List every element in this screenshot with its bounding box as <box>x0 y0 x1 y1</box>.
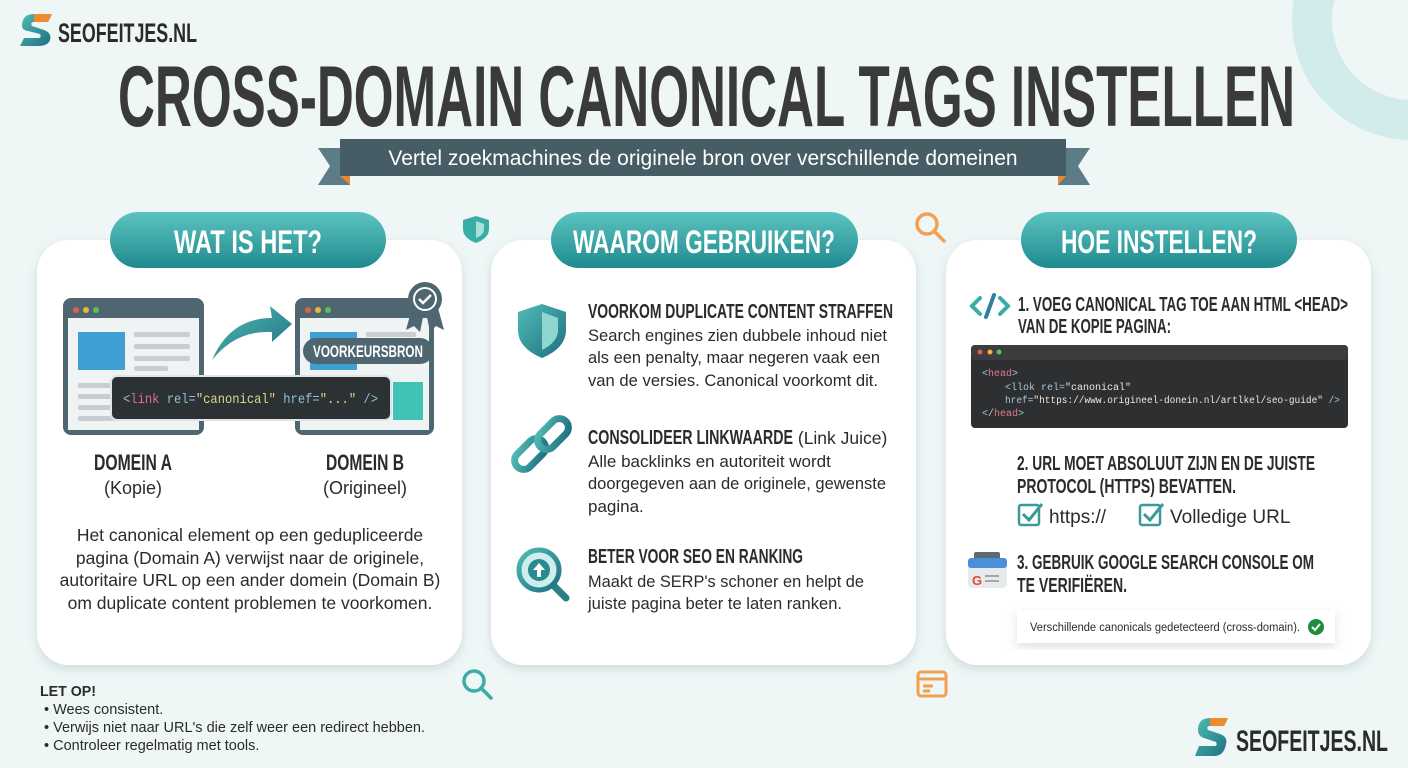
decorative ring <box>1312 0 1408 120</box>
step 1 <box>1018 294 1348 338</box>
labels domein: DOMEIN A <box>94 450 172 475</box>
checkboxes <box>1019 504 1290 528</box>
icon: search console: G <box>972 573 982 588</box>
notification: Verschillende canonicals gedetecteerd (cross-domain). <box>1030 622 1300 634</box>
icon: magnifier up <box>519 550 566 598</box>
arrow <box>212 306 292 360</box>
checkboxes: Volledige URL <box>1170 507 1290 528</box>
note: let op: • Controleer regelmatig met tools. <box>44 738 259 754</box>
item 2 <box>588 427 887 516</box>
logo bottom <box>1195 718 1388 758</box>
heading pill: wat is het: WAT IS HET? <box>174 224 322 260</box>
code block: href="https://www.origineel-donein.nl/artlkel/seo-guide" /> <box>1005 395 1340 407</box>
item 1: van de versies. Canonical voorkomt dit. <box>588 371 878 390</box>
badge: voorkeursbron <box>303 338 433 364</box>
item 2: CONSOLIDEER LINKWAARDE (Link Juice) <box>588 427 887 449</box>
step 1: VAN DE KOPIE PAGINA: <box>1018 316 1171 338</box>
icon: small shield <box>463 216 489 243</box>
item 3: Maakt de SERP's schoner en helpt de <box>588 572 864 591</box>
item 2: Alle backlinks en autoriteit wordt <box>588 452 831 471</box>
labels domein: (Kopie) <box>104 478 162 498</box>
description: autoritaire URL op een ander domein (Domain B) <box>60 570 440 590</box>
panel: waarom gebruiken <box>491 212 916 665</box>
item 1: Search engines zien dubbele inhoud niet <box>588 326 887 345</box>
subtitle ribbon: Vertel zoekmachines de originele bron over verschillende domeinen <box>388 147 1018 170</box>
code block: </head> <box>982 408 1024 420</box>
item 2: pagina. <box>588 497 644 516</box>
heading pill: waarom: WAAROM GEBRUIKEN? <box>573 224 835 260</box>
icon: shield <box>518 304 566 358</box>
item 2: doorgegeven aan de originele, gewenste <box>588 474 886 493</box>
heading pill: wat is het <box>110 212 386 268</box>
browser: domein B <box>295 298 434 435</box>
code snippet <box>111 376 391 420</box>
icon: small magnifier teal <box>464 671 491 698</box>
notification <box>1017 610 1335 643</box>
panel: wat is het <box>37 212 462 665</box>
item 1: als een penalty, maar negeren vaak een <box>588 348 880 367</box>
item 3: BETER VOOR SEO EN RANKING <box>588 546 803 568</box>
heading pill: waarom <box>551 212 858 268</box>
panel: hoe instellen <box>946 212 1371 665</box>
item 3: juiste pagina beter te laten ranken. <box>587 594 842 613</box>
code block: <head> <box>982 368 1018 380</box>
icon: search console <box>968 552 1007 588</box>
code block: <llok rel="canonical" <box>1005 382 1131 394</box>
step 2 <box>1017 453 1315 498</box>
step 2: PROTOCOL (HTTPS) BEVATTEN. <box>1017 476 1236 498</box>
heading pill: hoe <box>1021 212 1297 268</box>
note: let op: LET OP! <box>40 683 96 700</box>
icon: small magnifier orange <box>917 214 944 241</box>
icon: browser orange <box>918 672 946 696</box>
checkboxes: https:// <box>1049 507 1107 528</box>
code block <box>971 345 1348 428</box>
note: let op <box>40 683 425 754</box>
labels domein <box>94 450 407 498</box>
item 1: VOORKOM DUPLICATE CONTENT STRAFFEN <box>588 301 893 323</box>
labels domein: (Origineel) <box>323 478 407 498</box>
note: let op: • Wees consistent. <box>44 702 163 718</box>
item 3 <box>587 546 864 613</box>
badge: voorkeursbron: VOORKEURSBRON <box>313 342 423 361</box>
description <box>60 525 440 613</box>
description: Het canonical element op een gedupliceerde <box>77 525 423 545</box>
icon: code <box>972 295 1008 317</box>
item 1 <box>588 301 893 390</box>
step 3 <box>1017 552 1314 597</box>
note: let op: • Verwijs niet naar URL's die zelf weer een redirect hebben. <box>44 720 425 736</box>
description: om duplicate content problemen te voorkomen. <box>68 593 432 613</box>
icon: link <box>511 415 572 473</box>
subtitle ribbon <box>318 139 1090 185</box>
heading pill: hoe: HOE INSTELLEN? <box>1061 224 1257 260</box>
description: pagina (Domain A) verwijst naar de originele, <box>76 548 424 568</box>
browser: domein A <box>63 298 204 435</box>
icon: award ribbon <box>406 282 444 332</box>
labels domein: DOMEIN B <box>326 450 404 475</box>
logo top: SEOFEITJES.NL <box>58 18 197 48</box>
logo top <box>20 14 197 48</box>
step 3: TE VERIFIËREN. <box>1017 574 1127 597</box>
code snippet: <link rel="canonical" href="..." /> <box>123 392 378 408</box>
